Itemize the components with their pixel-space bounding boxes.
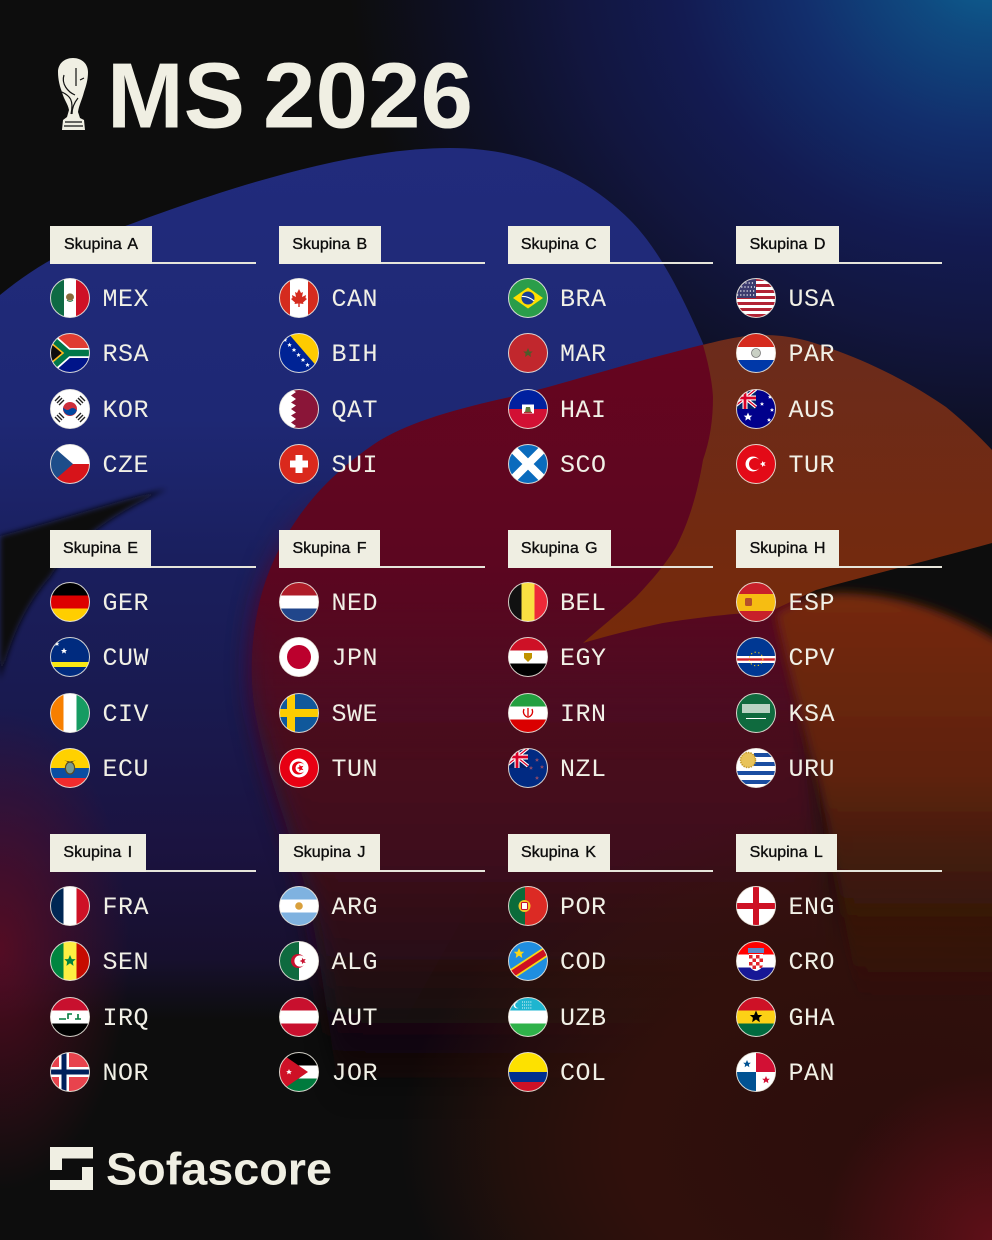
- team: SWE: SWE: [332, 700, 378, 728]
- heading: Skupina K: Skupina K: [521, 844, 596, 861]
- team: EGY: EGY: [560, 644, 607, 672]
- team: ALG: ALG: [332, 948, 378, 976]
- team: BRA: BRA: [560, 284, 607, 314]
- team: UZB: [508, 997, 607, 1037]
- team: AUT: AUT: [332, 1004, 378, 1032]
- panel: Skupina I: [50, 834, 256, 1092]
- team: RSA: [50, 333, 149, 373]
- team: KOR: KOR: [102, 396, 149, 424]
- team: GHA: [736, 997, 835, 1037]
- team: AUS: [736, 389, 835, 429]
- team: CUW: CUW: [102, 644, 149, 672]
- team: CZE: CZE: [102, 450, 149, 480]
- team: TUN: [279, 748, 378, 788]
- team: RSA: RSA: [102, 340, 149, 368]
- team: COD: [508, 941, 607, 981]
- panel: Skupina C: [508, 226, 713, 484]
- heading: Skupina J: Skupina J: [293, 844, 365, 861]
- team: KSA: [736, 693, 835, 733]
- team: PAR: PAR: [788, 340, 835, 368]
- team: KOR: [50, 389, 149, 429]
- heading: Skupina I: [50, 834, 146, 872]
- team: URU: [736, 748, 835, 788]
- heading: Skupina G: Skupina G: [521, 540, 598, 557]
- heading: Skupina I: Skupina I: [63, 844, 132, 861]
- team: SUI: [279, 444, 378, 484]
- team: AUS: AUS: [788, 396, 835, 424]
- team: SUI: SUI: [332, 450, 378, 480]
- team: NOR: NOR: [102, 1058, 149, 1088]
- team: BEL: [508, 582, 607, 622]
- heading: Skupina B: [279, 226, 380, 264]
- team: FRA: FRA: [102, 892, 149, 922]
- team: HAI: HAI: [560, 396, 607, 424]
- team: TUR: [736, 444, 835, 484]
- team: NOR: [50, 1052, 149, 1092]
- team: POR: POR: [560, 892, 607, 922]
- heading: Skupina K: [508, 834, 610, 872]
- panel: Skupina K: [508, 834, 713, 1092]
- team: SEN: [50, 941, 149, 981]
- team: MEX: [50, 278, 149, 318]
- team: CAN: [279, 278, 378, 318]
- heading: Skupina B: Skupina B: [292, 236, 367, 253]
- team: CIV: [50, 693, 149, 733]
- team: ESP: [736, 582, 835, 622]
- team: JOR: [279, 1052, 378, 1092]
- panel: Skupina A: [50, 226, 256, 484]
- heading: Skupina J: [279, 834, 380, 872]
- team: ESP: ESP: [788, 588, 835, 618]
- panel: Skupina E: [50, 530, 256, 788]
- team: JOR: JOR: [332, 1058, 378, 1088]
- team: ENG: [736, 886, 835, 926]
- team: PAN: PAN: [788, 1058, 835, 1088]
- team: IRQ: IRQ: [102, 1004, 149, 1032]
- heading: Skupina D: Skupina D: [750, 236, 825, 253]
- heading: Skupina C: Skupina C: [521, 236, 597, 253]
- heading: Skupina A: [50, 226, 152, 264]
- team: GHA: GHA: [788, 1004, 835, 1032]
- team: USA: USA: [788, 284, 835, 314]
- team: USA: [736, 278, 835, 318]
- team: ARG: ARG: [332, 892, 378, 922]
- team: BEL: BEL: [560, 588, 607, 618]
- heading: Skupina C: [508, 226, 610, 264]
- title: 2026: [263, 44, 473, 148]
- team: COD: COD: [560, 948, 607, 976]
- heading: Skupina A: Skupina A: [64, 236, 138, 253]
- team: BRA: [508, 278, 607, 318]
- team: SCO: [508, 444, 607, 484]
- team: NZL: NZL: [560, 754, 607, 784]
- team: MAR: [508, 333, 607, 373]
- team: TUR: TUR: [788, 450, 835, 480]
- heading: Skupina H: [736, 530, 839, 568]
- heading: Skupina L: Skupina L: [750, 844, 823, 861]
- team: COL: [508, 1052, 607, 1092]
- team: CUW: [50, 637, 149, 677]
- team: QAT: QAT: [332, 396, 378, 424]
- team: SEN: SEN: [102, 948, 149, 976]
- panel: Skupina D: [736, 226, 942, 484]
- team: SWE: [279, 693, 378, 733]
- panel: Skupina B: [279, 226, 485, 484]
- team: EGY: [508, 637, 607, 677]
- team: ECU: [50, 748, 149, 788]
- panel: Skupina G: [508, 530, 713, 788]
- heading: Skupina F: Skupina F: [292, 540, 367, 557]
- team: URU: URU: [788, 754, 835, 784]
- team: CRO: [736, 941, 835, 981]
- team: CIV: CIV: [102, 700, 149, 728]
- panel: Skupina J: [279, 834, 485, 1092]
- team: IRQ: [50, 997, 149, 1037]
- panel: Skupina F: [279, 530, 485, 788]
- team: PAN: [736, 1052, 835, 1092]
- team: HAI: [508, 389, 607, 429]
- team: UZB: UZB: [560, 1004, 607, 1032]
- panel: Skupina H: [736, 530, 942, 788]
- team: BIH: [279, 333, 378, 373]
- heading: Skupina H: Skupina H: [750, 540, 825, 557]
- team: NZL: [508, 748, 607, 788]
- team: ECU: ECU: [102, 754, 149, 784]
- team: ALG: [279, 941, 378, 981]
- team: MEX: MEX: [102, 284, 149, 314]
- team: ARG: [279, 886, 378, 926]
- heading: Skupina E: [50, 530, 151, 568]
- team: SCO: SCO: [560, 450, 607, 480]
- team: CPV: CPV: [788, 644, 835, 672]
- panel: Skupina L: [736, 834, 942, 1092]
- icon: Sofascore mark: [50, 1147, 93, 1190]
- heading: Skupina D: [736, 226, 839, 264]
- team: BIH: BIH: [332, 340, 378, 368]
- heading: Skupina G: [508, 530, 611, 568]
- team: AUT: [279, 997, 378, 1037]
- team: MAR: MAR: [560, 340, 607, 368]
- icon: trophy: [58, 58, 88, 130]
- team: COL: COL: [560, 1058, 607, 1088]
- team: CAN: CAN: [332, 284, 378, 314]
- title: MS: [107, 44, 245, 148]
- team: TUN: TUN: [332, 754, 378, 784]
- team: NED: [279, 582, 378, 622]
- team: JPN: JPN: [332, 644, 378, 672]
- team: FRA: [50, 886, 149, 926]
- team: CPV: [736, 637, 835, 677]
- team: IRN: IRN: [560, 700, 607, 728]
- team: NED: NED: [332, 588, 378, 618]
- title: [58, 44, 473, 148]
- team: JPN: [279, 637, 378, 677]
- team: CRO: CRO: [788, 948, 835, 976]
- team: QAT: [279, 389, 378, 429]
- heading: Skupina L: [736, 834, 836, 872]
- team: CZE: [50, 444, 149, 484]
- team: PAR: [736, 333, 835, 373]
- team: KSA: KSA: [788, 700, 835, 728]
- team: IRN: [508, 693, 607, 733]
- heading: Skupina F: [279, 530, 380, 568]
- team: ENG: ENG: [788, 892, 835, 922]
- logo: Sofascore: Sofascore: [106, 1144, 332, 1194]
- team: GER: [50, 582, 149, 622]
- team: GER: GER: [102, 588, 149, 618]
- heading: Skupina E: Skupina E: [63, 540, 138, 557]
- team: POR: [508, 886, 607, 926]
